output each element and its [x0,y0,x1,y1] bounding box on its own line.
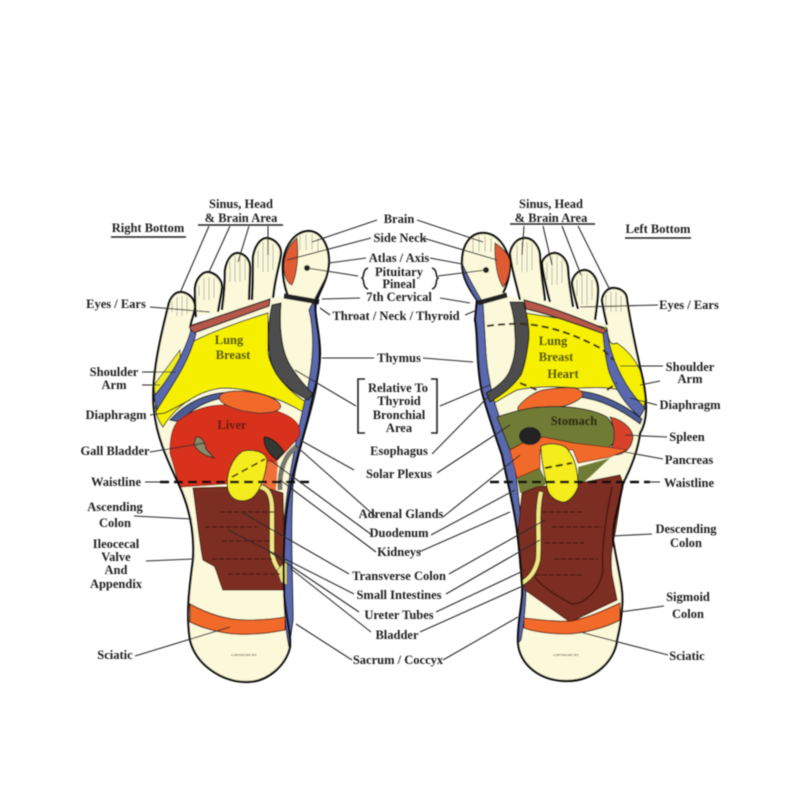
heading: right bottom: Right Bottom [112,221,185,235]
olive waist band [517,458,610,493]
sinus label left: & Brain Area [205,211,278,225]
sciatic band [524,603,620,634]
copyright note: COPYRIGHT BY [553,653,579,657]
kidney [541,444,578,502]
left side labels [80,297,150,662]
left side labels: Eyes / Ears [86,297,146,311]
centre labels: Adrenal Glands [359,507,444,521]
centre labels: Relative To [368,381,428,395]
yellow lung and breast zone [156,313,307,427]
ureter tube [260,487,285,578]
big toe [462,233,510,300]
inner blue stripe [283,275,327,647]
throat band [284,296,319,302]
big toe red patch [284,238,298,285]
adrenal dark patch [264,437,284,460]
sinus label right: Sinus, Head [519,197,583,211]
orange patch beside kidney [262,462,278,490]
third toe [222,253,250,310]
throat band [478,295,507,303]
sciatic band [190,604,285,634]
left side labels: Ileocecal [93,537,140,551]
organ labels, left bottom: Stomach [551,414,597,428]
diaphragm band [578,391,642,424]
left side labels: Appendix [90,577,143,591]
centre labels: Ureter Tubes [364,608,434,622]
centre labels: Kidneys [377,545,421,559]
left side labels: Waistline [91,475,141,489]
pineal dot [483,267,489,273]
right side labels: Spleen [669,430,705,444]
centre labels: Thymus [377,351,421,365]
second toe [510,238,545,301]
third toe [542,253,573,307]
outer blue stripe [603,330,645,417]
little toe [602,288,627,325]
right side labels: Eyes / Ears [659,298,719,312]
right side labels: Arm [678,372,703,386]
left side labels: Gall Bladder [80,444,150,458]
centre labels: Solar Plexus [366,467,432,481]
gall bladder [194,437,214,458]
organ labels, left bottom [539,334,597,428]
left side labels: Colon [99,516,131,530]
inner blue stripe [462,263,526,643]
inner colon outline [535,487,612,604]
left side labels: Valve [101,550,131,564]
centre labels: Atlas / Axis [369,251,429,265]
centre labels: 7th Cervical [366,290,432,304]
second toe [252,238,281,300]
centre labels: Side Neck [373,231,427,245]
sinus label right [510,197,595,225]
right side labels: Colon [670,536,702,550]
foot body fill [475,293,646,681]
thyroid dashed lines [487,324,617,468]
orange solar plexus [518,388,583,412]
right side labels: Diaphragm [659,398,721,412]
yellow shoulder wedge [154,350,180,405]
gray thymus band [486,302,529,402]
centre labels: Small Intestines [356,588,442,602]
spleen [608,417,633,455]
right side labels: Shoulder [666,360,715,374]
organ labels, right bottom: Breast [216,348,251,362]
right side labels: Colon [672,607,704,621]
left side labels: Shoulder [90,365,139,379]
little toe [168,292,195,328]
colon [518,475,623,622]
organ labels, left bottom: Lung [539,334,568,348]
centre labels: Thyroid [377,394,421,408]
big toe red patch [495,243,510,287]
orange solar plexus [218,387,282,417]
fourth toe [195,272,222,317]
yellow lung breast heart zone [484,313,645,413]
outer blue stripe [154,330,196,410]
left foot: right bottom [153,231,329,682]
labels [80,197,721,667]
ureter tube highlight [260,487,285,578]
left side labels: Arm [102,378,127,392]
right foot: left bottom [462,233,646,681]
left side labels: And [105,563,128,577]
kidney [227,450,267,501]
organ labels, left bottom: Heart [547,367,579,381]
sinus label left: Sinus, Head [209,197,273,211]
brackets [358,268,438,433]
left side labels: Diaphragm [85,408,147,422]
centre labels: Transverse Colon [352,569,446,583]
centre labels: Throat / Neck / Thyroid [332,309,460,323]
waistline dashed rule, left [160,481,311,483]
copyright note: COPYRIGHT BY [231,653,257,657]
right side labels: Descending [655,522,717,536]
centre labels [332,212,460,667]
centre labels: Esophagus [370,444,428,458]
heading: left bottom: Left Bottom [626,222,691,236]
toe hatching [172,234,318,316]
organ labels, right bottom [215,333,251,432]
bladder [277,560,287,585]
colon [193,486,285,590]
pancreas [510,437,627,478]
centre labels: Pituitary [375,265,424,279]
right side labels: Sciatic [669,649,705,663]
right side labels: Sigmoid [666,590,710,604]
left side labels: Sciatic [97,648,133,662]
foot body fill [153,296,320,682]
centre labels: Bronchial [373,408,426,422]
organ labels, right bottom: Lung [215,333,244,347]
fourth toe [572,270,598,320]
ureter tube highlight [522,492,541,583]
waistline dashed rule, right [490,481,650,483]
eye and ear strip [190,299,270,334]
sinus label right: & Brain Area [515,211,588,225]
pineal dot [304,265,310,271]
organ labels, right bottom: Liver [217,418,247,432]
gray duodenum tube [280,447,296,490]
right side labels: Pancreas [665,453,713,467]
gray thymus band [268,303,313,400]
big toe [283,231,329,300]
ureter tube [522,492,541,583]
organ labels, left bottom: Breast [539,350,574,364]
transverse colon dashes [535,512,602,575]
diaphragm band [170,392,245,422]
leader lines [134,220,668,660]
centre labels: Bladder [375,628,419,642]
centre labels: Pineal [382,277,416,291]
foot outline stroke [475,300,646,681]
right side labels [655,298,721,663]
toe hatching [473,236,621,312]
kidney dash [232,459,265,477]
foot outline stroke [153,300,320,682]
transverse colon dashes [205,512,280,574]
right side labels: Waistline [664,476,714,490]
centre labels: Sacrum / Coccyx [353,653,444,667]
stomach [497,407,616,450]
centre labels: Area [386,421,413,435]
eye and ear strip [524,300,607,334]
centre labels: Duodenum [369,526,429,540]
sinus label left [198,197,283,225]
left side labels: Ascending [87,500,144,514]
liver [170,405,300,487]
centre labels: Brain [384,212,414,226]
black adrenal blob [519,427,541,445]
